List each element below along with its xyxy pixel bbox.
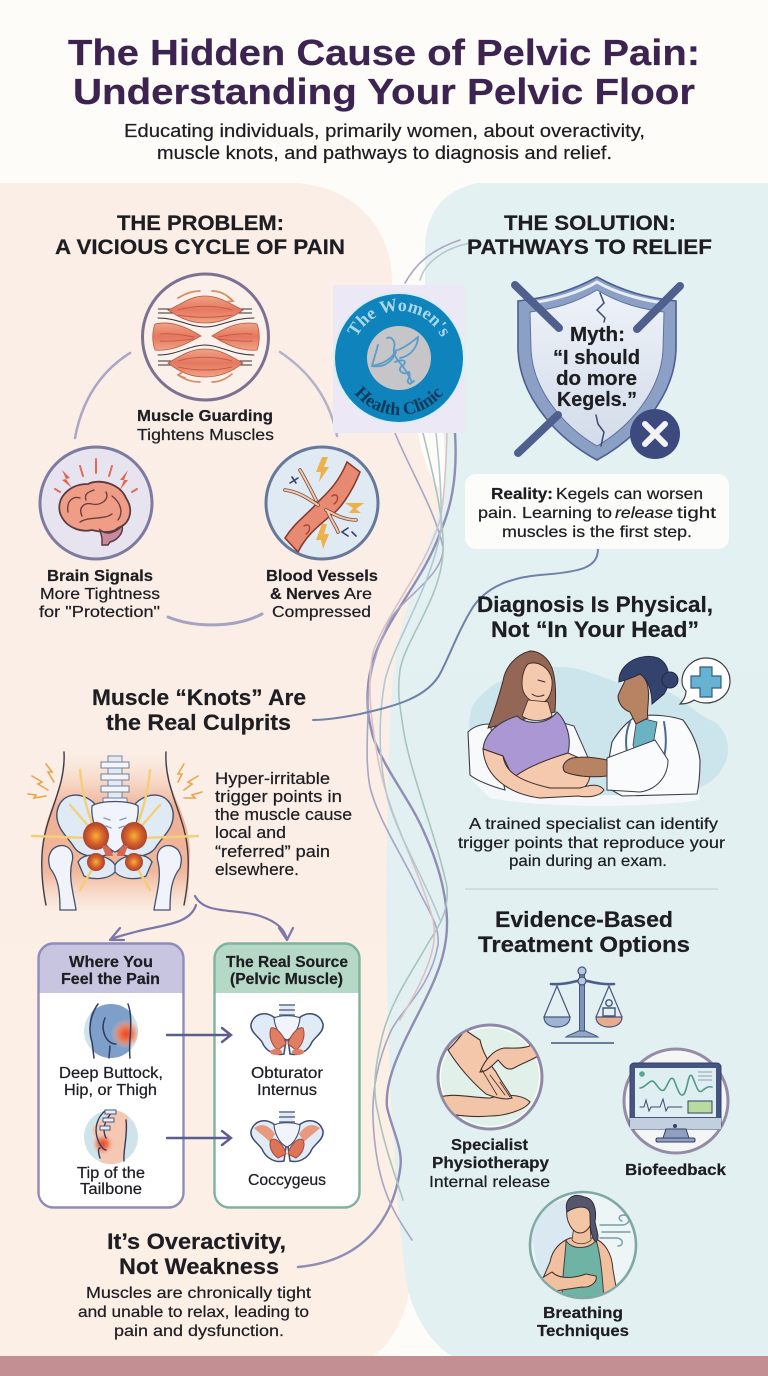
vessel <box>285 462 360 552</box>
label: muscle guarding: Tightens Muscles <box>137 427 274 444</box>
panel: the solution background <box>387 183 768 1356</box>
illustration: pelvis with trigger points <box>28 752 202 912</box>
heading: diagnosis: Diagnosis Is Physical, <box>477 592 713 617</box>
doctor sleeve <box>607 740 668 792</box>
heading: the solution: THE SOLUTION: <box>504 212 676 235</box>
label: blood vessels: Are <box>344 586 372 603</box>
label: specialist physiotherapy: Specialist <box>451 1137 529 1154</box>
text: specialist exam <box>458 816 726 870</box>
brain shape <box>59 482 130 532</box>
breath lines <box>600 1215 630 1246</box>
heading: the problem <box>55 212 345 259</box>
arrow: to real source <box>195 896 293 940</box>
heading: overactivity: Not Weakness <box>119 1254 279 1279</box>
cracks <box>596 293 605 446</box>
label: obturator: Obturator <box>251 1065 323 1082</box>
text: overactivity explanation: pain and dysfunction. <box>114 1323 284 1340</box>
heading: overactivity: It’s Overactivity, <box>107 1229 286 1254</box>
label: tip of the: Tip of the <box>77 1165 145 1182</box>
title: The Hidden Cause of Pelvic Pain: <box>68 32 700 73</box>
heading: the solution <box>467 212 712 259</box>
body outline <box>42 752 188 905</box>
x badge <box>630 409 680 459</box>
heading: muscle knots: the Real Culprits <box>106 710 291 735</box>
nerves <box>285 470 356 532</box>
doctor hand <box>563 757 607 777</box>
myth text: Myth: <box>570 324 625 346</box>
patient arm <box>483 749 604 798</box>
lightning marks <box>28 764 202 798</box>
label: biofeedback: Biofeedback <box>625 1162 726 1179</box>
neck <box>572 1226 591 1244</box>
speech bubble <box>680 658 730 704</box>
cycle arrows <box>75 352 337 625</box>
logo text: The Women's <box>346 298 448 336</box>
label: blood vessels: Compressed <box>272 604 371 621</box>
text: specialist exam: pain during an exam. <box>509 853 667 870</box>
text: specialist exam: A trained specialist can identify <box>469 816 718 833</box>
callout: reality: muscles is the first step. <box>502 524 692 541</box>
callout: reality: tight <box>677 505 717 522</box>
icon: brain <box>40 447 152 559</box>
upper hand <box>479 1045 537 1072</box>
text: trigger points: trigger points in <box>215 788 342 806</box>
label: specialist physiotherapy <box>429 1137 550 1191</box>
subtitle: Educating individuals, primarily women, about overactivity, <box>124 121 645 141</box>
icon: breathing techniques <box>530 1192 636 1300</box>
label: muscle guarding: Muscle Guarding <box>137 408 273 425</box>
text: trigger points: “referred” pain <box>215 843 330 861</box>
doctor hair <box>619 656 669 704</box>
crossed bars <box>515 285 680 453</box>
icon: pelvis obturator internus <box>251 1005 323 1055</box>
label: specialist physiotherapy: Physiotherapy <box>432 1155 549 1172</box>
heading: treatment options <box>478 907 690 957</box>
label: brain signals <box>39 568 160 621</box>
subtitle <box>124 121 645 163</box>
doctor neck and face <box>618 673 649 724</box>
header <box>214 943 360 993</box>
arrow: buttock to obturator <box>167 1028 231 1042</box>
icon: blood vessels and nerves <box>266 447 378 559</box>
heading: the problem: THE PROBLEM: <box>117 212 284 235</box>
head <box>567 1198 594 1233</box>
text: trigger points: local and <box>215 824 286 842</box>
caduceus <box>372 337 418 384</box>
panel: where you feel the pain <box>38 943 184 1208</box>
footer band <box>0 1356 768 1376</box>
heading: the solution: PATHWAYS TO RELIEF <box>467 236 712 259</box>
heading: treatment options: Treatment Options <box>478 932 690 957</box>
middle hand <box>448 1030 512 1099</box>
skin <box>42 752 190 912</box>
patient shirt <box>483 712 569 778</box>
lower pelvic ring <box>78 855 152 879</box>
icon: pelvis coccygeus <box>251 1112 323 1162</box>
icon: muscle guarding <box>142 274 268 400</box>
lightning <box>316 457 364 549</box>
callout: reality: pain. Learning to <box>478 505 612 522</box>
pillow <box>468 724 505 790</box>
icon: myth shield <box>515 277 680 460</box>
icon: biofeedback monitor <box>624 1049 728 1153</box>
heading: overactivity <box>107 1229 286 1279</box>
right ilium <box>118 795 173 857</box>
flowing connector lines <box>298 240 470 1267</box>
panel: the problem background <box>0 183 442 1356</box>
label: blood vessels <box>266 568 378 621</box>
label: tailbone: Tailbone <box>80 1181 142 1198</box>
panel: where you feel the pain: Feel the Pain <box>61 971 160 988</box>
text: overactivity explanation: Muscles are chronically tight <box>86 1285 312 1302</box>
patient neck <box>522 700 552 720</box>
shoulders and arms <box>540 1238 618 1298</box>
label: breathing techniques: Breathing <box>543 1305 623 1322</box>
myth text: do more <box>556 368 637 390</box>
icon: buttock <box>84 1004 141 1058</box>
label: brain signals: for "Protection" <box>39 604 160 621</box>
bottom muscle belly <box>168 349 243 377</box>
callout: reality: Kegels can worsen <box>556 486 703 503</box>
text: overactivity explanation <box>78 1285 312 1340</box>
header <box>38 943 184 993</box>
heading: treatment options: Evidence-Based <box>495 907 673 932</box>
title: Understanding Your Pelvic Floor <box>73 71 695 112</box>
callout: reality: Reality: <box>491 486 553 503</box>
illustration: patient and doctor <box>468 651 730 806</box>
right muscle belly <box>212 323 259 350</box>
heading: diagnosis: Not “In Your Head” <box>491 617 699 642</box>
sacrum <box>92 802 138 852</box>
text: trigger points <box>215 770 352 879</box>
heading: the problem: A VICIOUS CYCLE OF PAIN <box>55 236 345 259</box>
title <box>68 32 700 112</box>
left muscle belly <box>153 323 201 350</box>
label: deep buttock: Deep Buttock, <box>59 1065 163 1082</box>
myth text: “I should <box>553 347 640 369</box>
tank top <box>562 1240 604 1300</box>
label: breathing techniques <box>537 1305 629 1340</box>
plus sign <box>691 667 721 697</box>
stethoscope <box>626 722 666 770</box>
callout: reality: release <box>615 505 673 522</box>
hair <box>566 1195 598 1242</box>
left ilium <box>57 795 112 857</box>
scrubs <box>633 717 657 770</box>
text: trigger points: the muscle cause <box>215 806 352 824</box>
arrow: to where you feel <box>110 905 196 940</box>
patient face <box>522 663 552 703</box>
label: brain signals: More Tightness <box>40 586 160 603</box>
doctor coat <box>607 715 700 796</box>
myth text <box>553 324 640 411</box>
watercolor wash <box>469 667 728 802</box>
label: brain signals: Brain Signals <box>47 568 153 585</box>
spine <box>108 756 122 808</box>
subtitle: muscle knots, and pathways to diagnosis and relief. <box>157 143 612 163</box>
label: breathing techniques: Techniques <box>537 1323 629 1340</box>
arm <box>542 1272 596 1291</box>
label: blood vessels: Blood Vessels <box>266 568 378 585</box>
femurs <box>49 846 76 910</box>
myth text: Kegels.” <box>557 389 637 411</box>
heading: diagnosis <box>477 592 713 642</box>
label: specialist physiotherapy: Internal release <box>429 1174 550 1191</box>
text: trigger points: Hyper-irritable <box>215 770 330 788</box>
panel: the real source <box>214 943 360 1208</box>
label: hip or thigh: Hip, or Thigh <box>64 1082 157 1099</box>
heading: muscle knots <box>92 685 306 735</box>
heading: muscle knots: Muscle “Knots” Are <box>92 685 306 710</box>
trigger knots <box>83 822 147 871</box>
patient belly <box>513 753 590 790</box>
icon: tailbone <box>84 1108 138 1165</box>
panel: the real source: (Pelvic Muscle) <box>230 971 343 988</box>
text: trigger points: elsewhere. <box>215 861 299 879</box>
label: muscle guarding <box>137 408 274 444</box>
label: blood vessels: & Nerves <box>270 586 340 603</box>
bed sheet <box>470 778 700 806</box>
text: specialist exam: trigger points that reproduce your <box>458 835 726 852</box>
panel: the real source: The Real Source <box>226 954 348 971</box>
panel: where you feel the pain: Where You <box>69 954 153 971</box>
label: internus: Internus <box>257 1082 317 1099</box>
yellow rays <box>32 770 198 890</box>
logo: the women's health clinic <box>333 285 465 433</box>
logo: the women's health clinic: Health Clinic <box>354 386 443 416</box>
text: overactivity explanation: and unable to relax, leading to <box>78 1304 309 1321</box>
label: coccygeus: Coccygeus <box>248 1172 326 1189</box>
callout: reality <box>465 474 729 549</box>
top muscle belly <box>168 296 243 323</box>
arrow: tailbone to coccygeus <box>167 1131 231 1145</box>
signal marks <box>55 459 137 492</box>
icon: scales <box>544 967 622 1043</box>
icon: specialist physiotherapy <box>436 1025 544 1129</box>
patient hair back <box>488 651 556 728</box>
arrow: reality to knots connector <box>313 549 598 720</box>
lower hand <box>436 1095 530 1117</box>
